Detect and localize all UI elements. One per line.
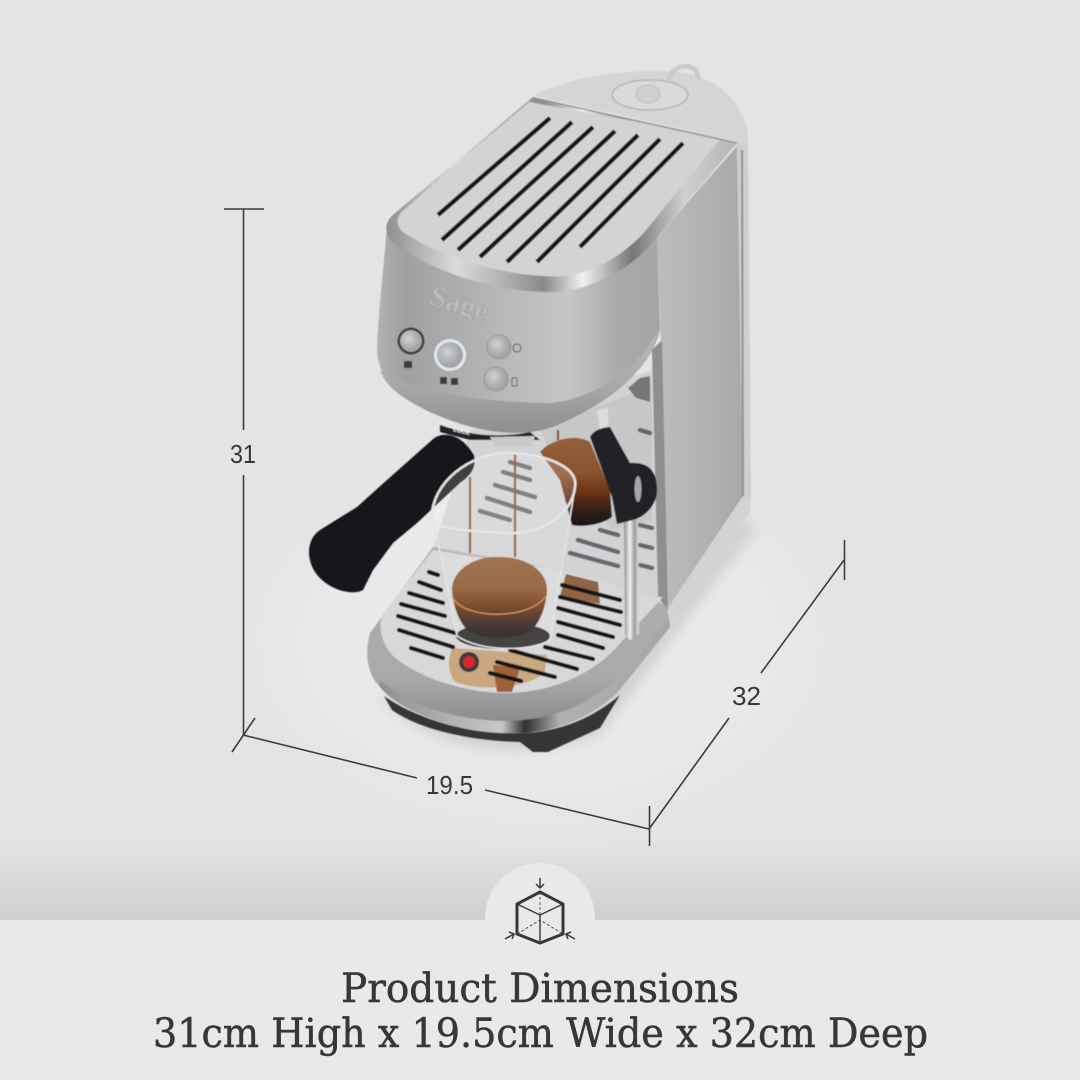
tray slots [398, 572, 621, 681]
icon: cube with arrows [505, 878, 575, 943]
crema ring [453, 596, 546, 614]
back coffee cup [540, 438, 612, 526]
icon badge [485, 863, 595, 973]
dimension label 32: 32 [732, 681, 761, 711]
title: Product Dimensions [341, 966, 739, 1012]
power button [487, 335, 511, 359]
rear glass wall [433, 370, 658, 598]
front coffee [452, 557, 547, 638]
rear arm [628, 376, 650, 402]
cup rest slots [438, 118, 683, 262]
double shot button [434, 339, 466, 371]
glass rim [432, 453, 575, 533]
drip tray plate [380, 550, 663, 693]
single shot button [398, 328, 424, 354]
front glass base [456, 623, 550, 649]
chrome column [652, 340, 668, 610]
top plate chrome rim [386, 97, 737, 292]
steam wand grip [590, 427, 657, 524]
dimension label 19.5: 19.5 [426, 770, 473, 800]
Sage logo: Sage [426, 279, 493, 328]
subtitle: 31cm High x 19.5cm Wide x 32cm Deep [153, 1011, 928, 1057]
tray reflection [449, 648, 547, 687]
dimension: height [224, 209, 264, 735]
steam button [484, 367, 508, 391]
front glass cup [432, 453, 575, 649]
water tank behind head [540, 385, 652, 530]
floor glow [200, 420, 880, 860]
top plate [398, 102, 722, 276]
lid edge [533, 98, 737, 143]
base edge strip [668, 496, 751, 628]
rear strip [737, 135, 751, 512]
rear tray reflection [560, 574, 600, 604]
tray rim front band [380, 618, 670, 733]
bottom panel [0, 920, 1080, 1080]
tray reflection dark [493, 665, 520, 692]
coffee machine [309, 66, 751, 752]
portafilter handle [309, 435, 475, 592]
group head [490, 436, 535, 447]
coffee streams [470, 430, 558, 557]
head lower band [380, 330, 658, 433]
wall reflections [480, 430, 652, 568]
tray rim [367, 547, 670, 733]
panel icons [404, 344, 521, 386]
wand pipe top [597, 408, 608, 430]
steam wand [624, 520, 639, 640]
red button [459, 652, 479, 672]
dimension: width [232, 718, 649, 829]
head body [377, 228, 660, 433]
water tank lid [533, 71, 748, 146]
grip loop hole [634, 476, 642, 502]
rear strip inner [741, 150, 744, 498]
dimension label 31: 31 [230, 439, 256, 469]
lid knob [636, 85, 660, 103]
lock ring [440, 425, 540, 440]
side panel [657, 146, 743, 608]
machine feet [384, 695, 620, 752]
floor shadow [380, 515, 755, 750]
dimension: depth [649, 540, 844, 846]
lid recess [612, 80, 688, 110]
lock label: LOCK [452, 427, 471, 438]
tank handle [669, 66, 699, 80]
